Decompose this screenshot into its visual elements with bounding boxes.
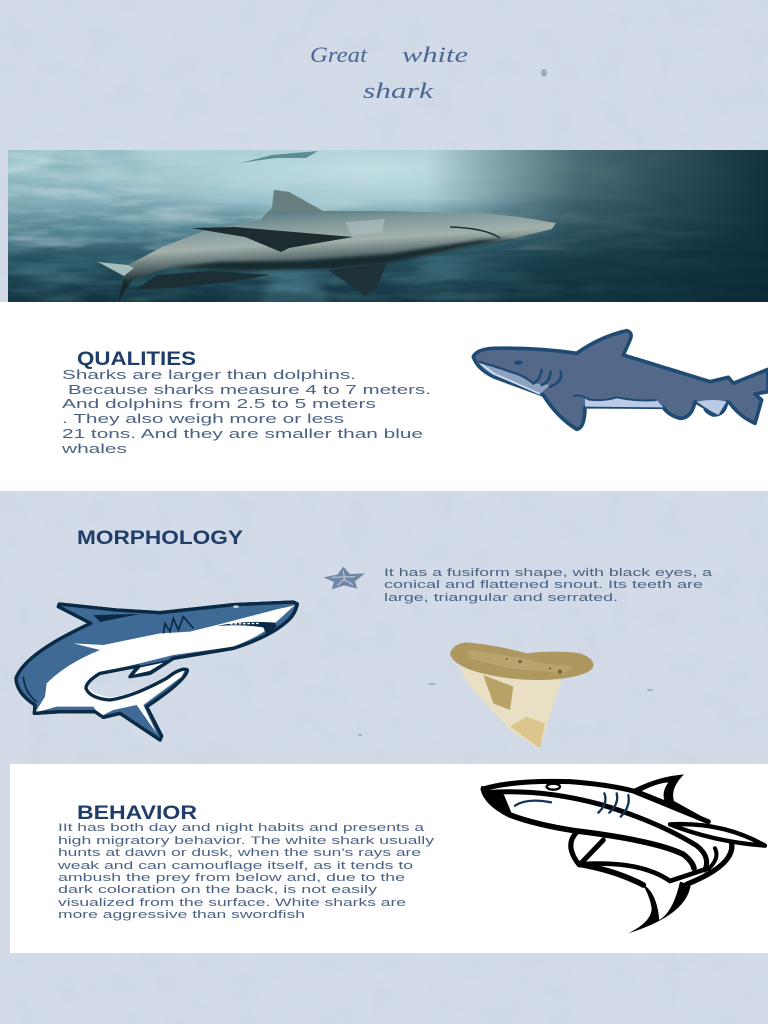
title: shark <box>363 78 435 103</box>
title: Great <box>310 42 368 67</box>
text block: morphology: conical and flattened snout. Its teeth are <box>384 579 703 591</box>
icon: starfish <box>323 567 365 589</box>
heading: behavior: BEHAVIOR <box>77 803 197 824</box>
text block: behavior <box>56 822 435 921</box>
text block: morphology: large, triangular and serrated. <box>384 592 618 604</box>
illustration: navy and white shark <box>16 602 297 740</box>
text block: qualities: Sharks are larger than dolphins. <box>62 368 356 382</box>
icon: fossil shark tooth <box>450 642 593 749</box>
panel: qualities <box>0 302 768 491</box>
title: white <box>402 42 468 67</box>
text block: qualities: And dolphins from 2.5 to 5 meters <box>62 397 376 411</box>
heading: qualities: QUALITIES <box>77 349 196 370</box>
text block: behavior: high migratory behavior. The white shark usually <box>58 835 435 847</box>
main shark <box>98 190 556 302</box>
text block: behavior: more aggressive than swordfish <box>58 909 305 921</box>
text block: behavior: dark coloration on the back, is not easily <box>58 884 378 896</box>
text block: behavior: ambush the prey from below and, due to the <box>58 872 405 884</box>
text block: qualities: 21 tons. And they are smaller than blue <box>62 427 423 441</box>
panel: behavior <box>10 764 768 953</box>
heading: morphology: MORPHOLOGY <box>77 528 243 549</box>
text block: qualities: whales <box>60 442 127 456</box>
text block: behavior: IIt has both day and night habits and presents a <box>58 822 425 834</box>
title <box>310 42 468 103</box>
text block: qualities <box>60 368 431 456</box>
icon: blue cartoon shark <box>473 331 768 429</box>
photo: shark underwater <box>8 150 768 302</box>
text block: morphology: It has a fusiform shape, with black eyes, a <box>384 567 713 579</box>
text block: behavior: visualized from the surface. White sharks are <box>58 897 406 909</box>
illustration: black line-art shark <box>482 774 765 933</box>
text block: qualities: Because sharks measure 4 to 7 meters. <box>68 383 431 397</box>
text block: morphology <box>384 567 713 604</box>
text block: qualities: . They also weigh more or less <box>62 412 344 426</box>
text block: behavior: weak and can camouflage itself, as it tends to <box>56 860 413 872</box>
text block: behavior: hunts at dawn or dusk, when the sun's rays are <box>58 847 421 859</box>
